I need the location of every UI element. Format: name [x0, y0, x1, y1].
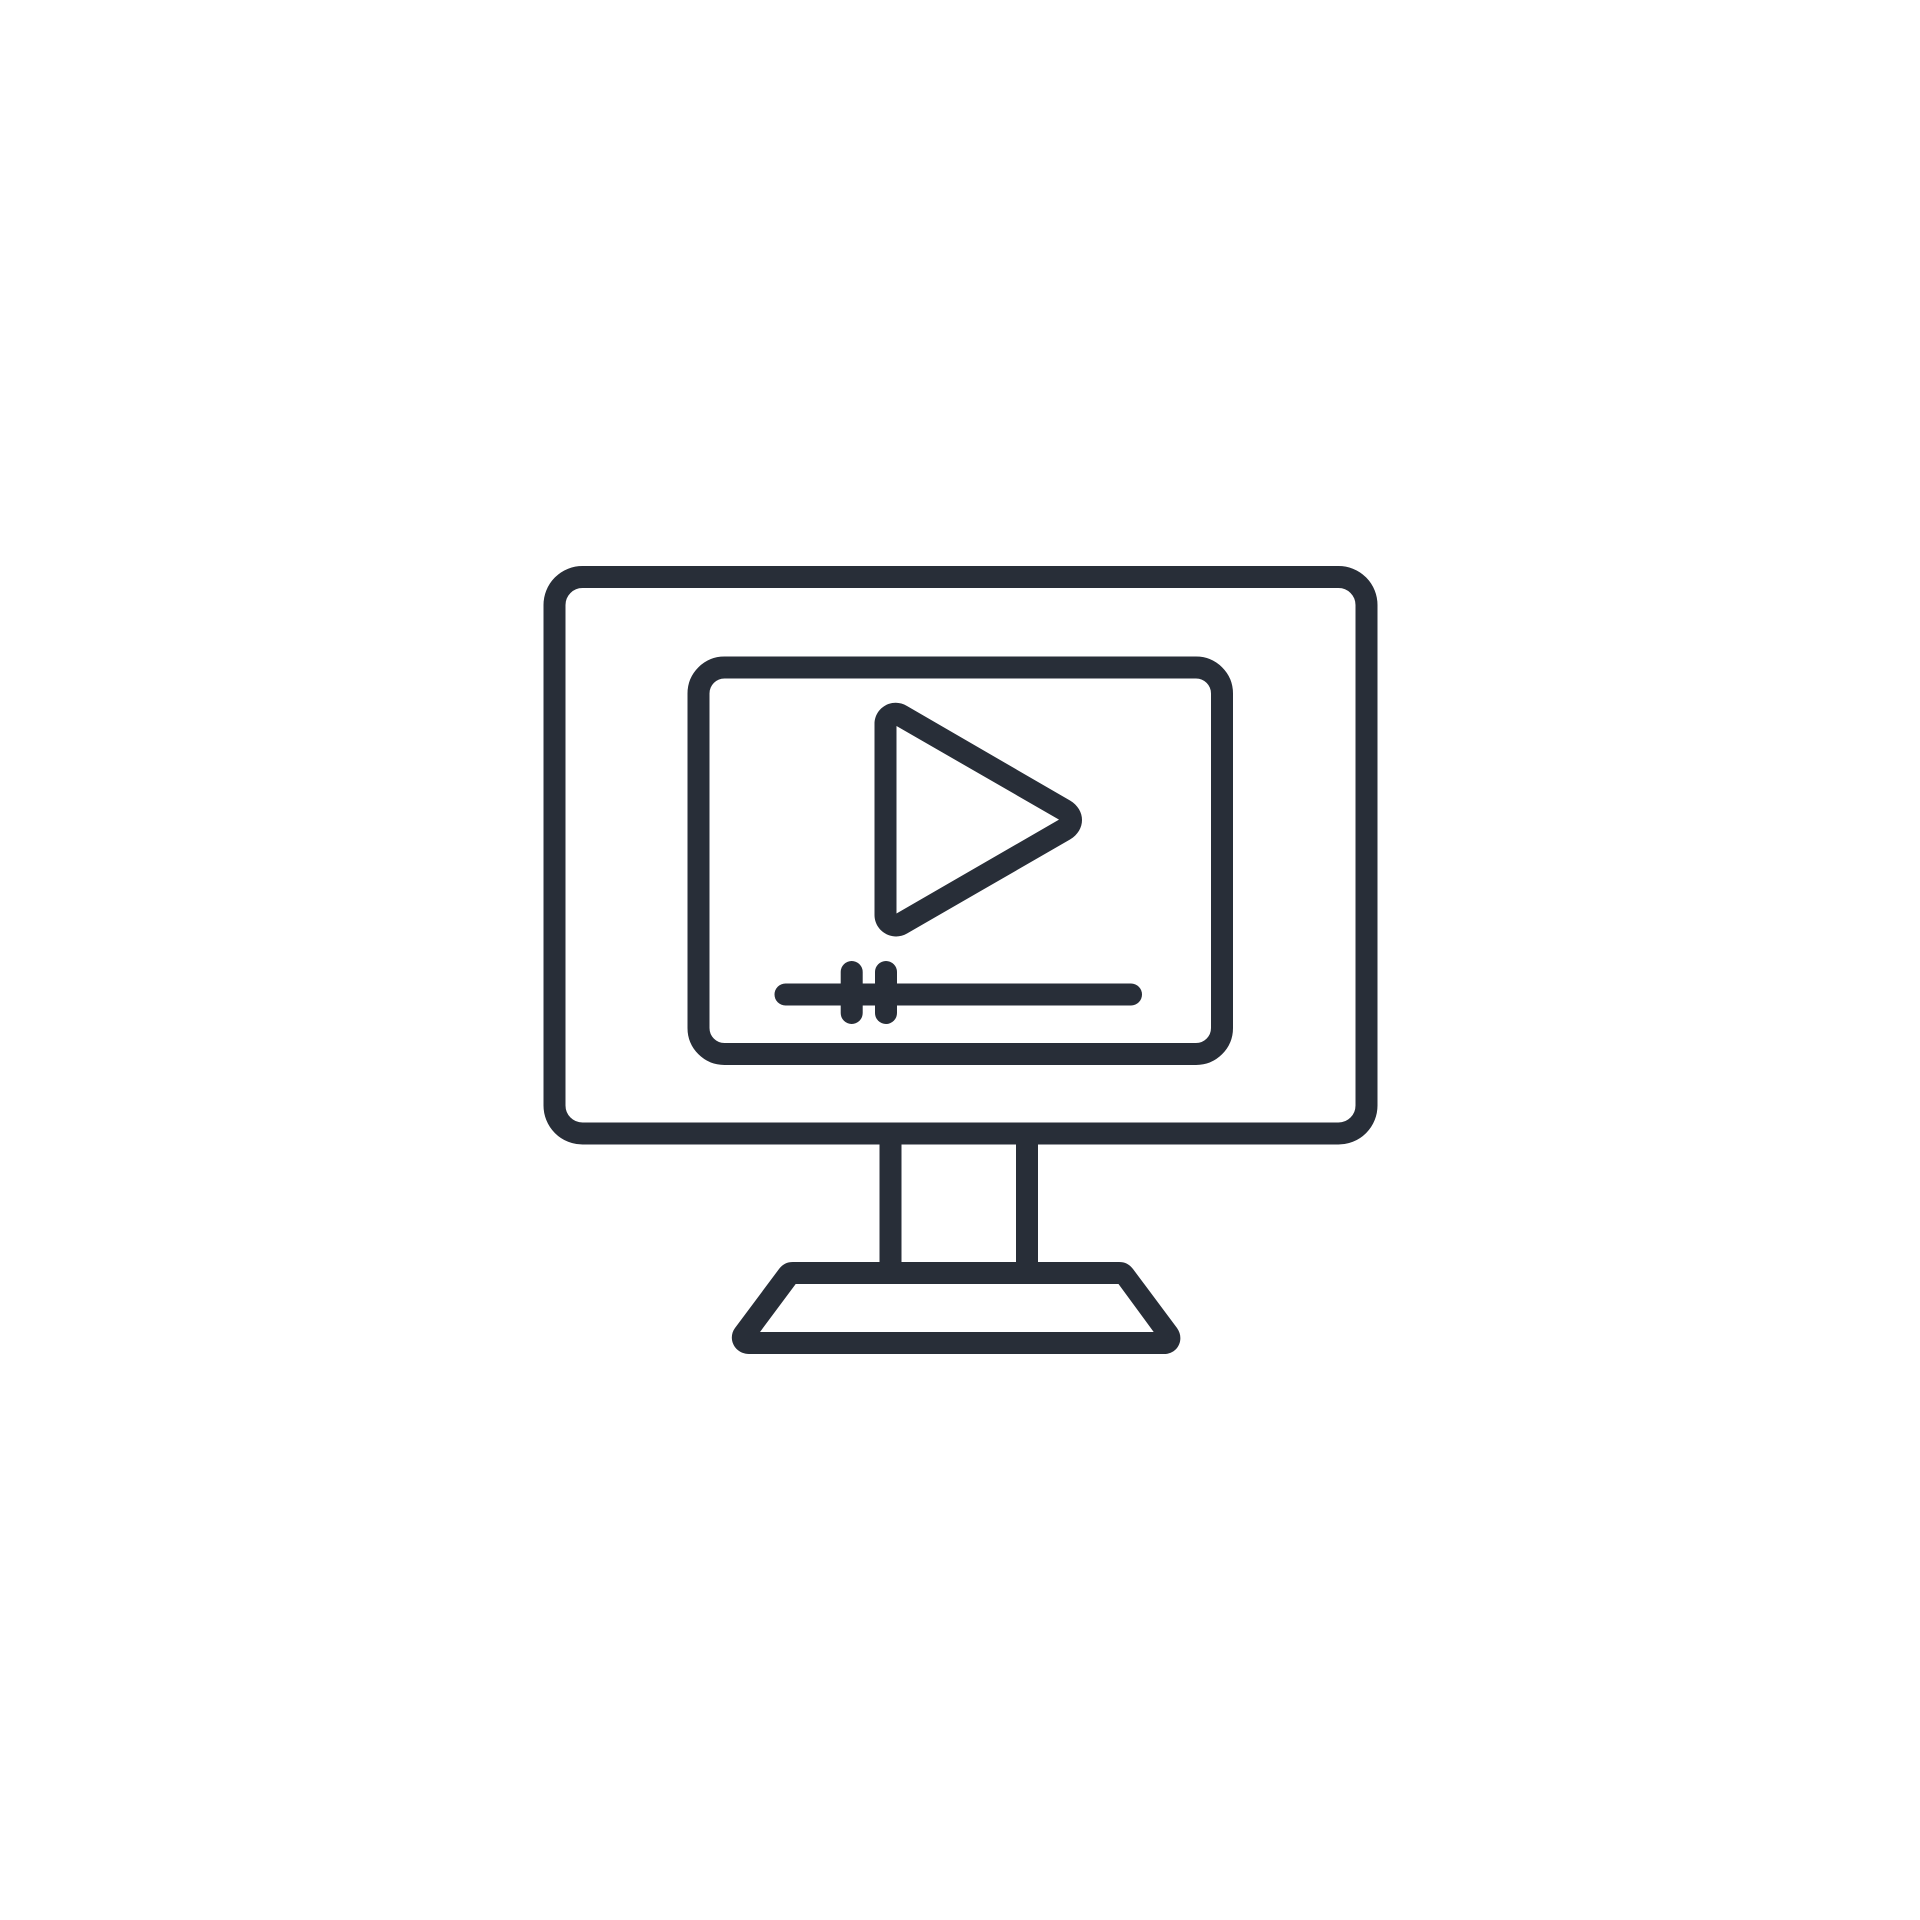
- monitor screen frame: [554, 577, 1366, 1134]
- monitor stand neck: [880, 1140, 1038, 1270]
- video player frame: [698, 668, 1222, 1054]
- monitor stand base: [732, 1262, 1180, 1354]
- video progress slider: [786, 972, 1131, 1013]
- icon: play triangle: [874, 703, 1082, 936]
